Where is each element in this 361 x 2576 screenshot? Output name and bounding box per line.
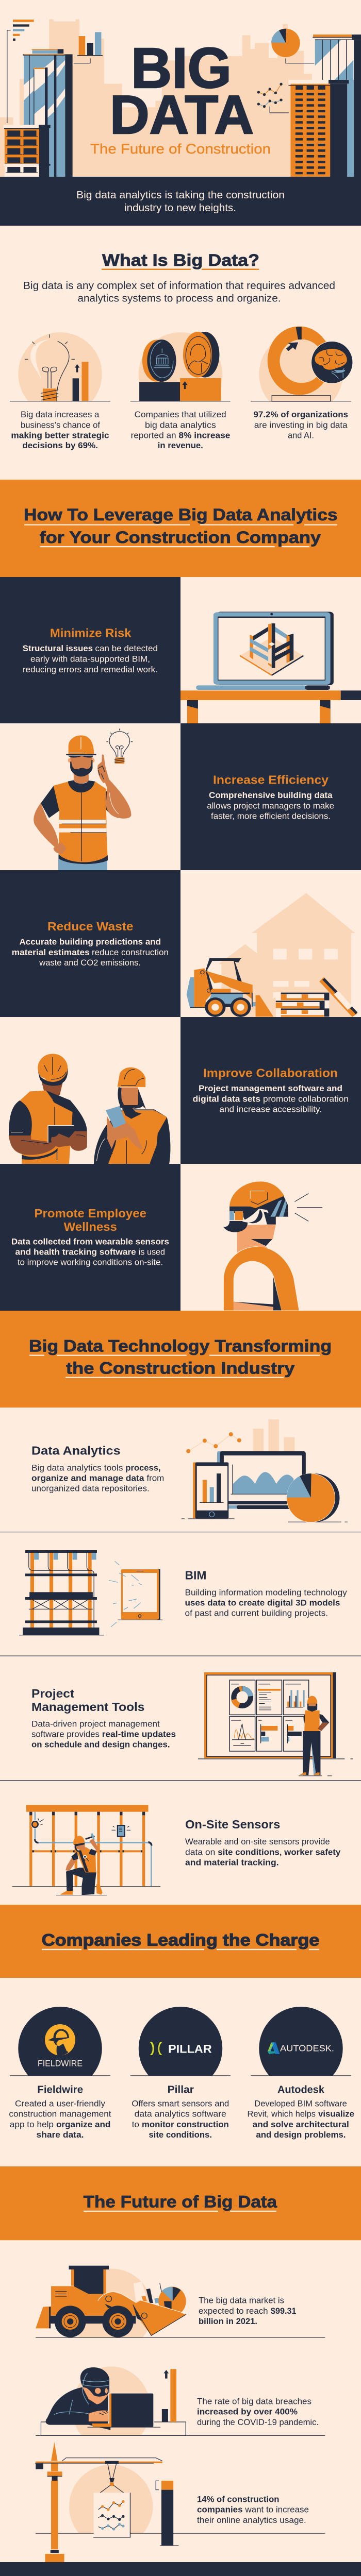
illustration: worker pointing at light bulb xyxy=(34,728,133,870)
minimize risk text: can be detected xyxy=(95,644,158,653)
reduce waste text: waste and CO2 emissions. xyxy=(39,958,141,968)
panel: future heading band xyxy=(0,2166,361,2240)
on-site sensors text: and material tracking. xyxy=(185,1858,279,1867)
increase efficiency text: faster, more efficient decisions. xyxy=(211,811,331,821)
project management text: Project xyxy=(31,1687,74,1700)
reduce waste text: reduce construction xyxy=(92,948,169,957)
stat: organizations: and AI. xyxy=(288,431,314,440)
stat: revenue: big data analytics xyxy=(145,420,216,430)
on-site sensors text: On-Site Sensors xyxy=(185,1818,280,1831)
illustration: worker in smart helmet xyxy=(223,1181,322,1310)
data analytics text: Big data analytics tools xyxy=(31,1464,123,1473)
improve collaboration text: Improve Collaboration xyxy=(203,1066,338,1080)
illustration: charts on monitor and phone xyxy=(182,1419,348,1522)
analytics text: companies xyxy=(197,2505,242,2515)
illustration: building frame and tablet xyxy=(19,1550,162,1635)
subtitle: The Future of Construction xyxy=(90,141,271,157)
stat: revenue: reported an xyxy=(131,431,176,440)
stat: organizations: are investing in big data xyxy=(254,420,348,430)
illustration: laptop with 3D building on desk xyxy=(180,612,361,723)
illustration: loader carrying charts xyxy=(36,2266,325,2338)
increase efficiency text: Comprehensive building data xyxy=(209,791,333,800)
autodesk text: Autodesk xyxy=(277,2084,325,2095)
pillar text: Pillar xyxy=(168,2084,194,2095)
reduce waste text: Accurate building predictions and xyxy=(20,937,161,946)
pillar text: site conditions. xyxy=(149,2130,212,2140)
autodesk text: and design problems. xyxy=(256,2130,346,2140)
reduce waste text: material estimates xyxy=(12,948,90,957)
fieldwire text: share data. xyxy=(36,2130,84,2140)
increase efficiency text: Increase Efficiency xyxy=(213,773,329,787)
on-site sensors text xyxy=(185,1818,341,1867)
employee wellness text: Data collected from wearable sensors xyxy=(11,1237,169,1246)
footer xyxy=(0,2562,361,2576)
breaches text: during the COVID-19 pandemic. xyxy=(197,2418,319,2427)
intro band: Big data analytics is taking the construction xyxy=(76,190,285,201)
BIM text xyxy=(185,1568,348,1618)
stat: revenue: Companies that utilized xyxy=(135,410,226,419)
improve collaboration text: and increase accessibility. xyxy=(219,1105,322,1114)
stat: revenue xyxy=(131,410,230,450)
data analytics text xyxy=(31,1444,164,1494)
title: BIG xyxy=(131,37,232,100)
stat: revenue: 8% increase xyxy=(178,431,230,440)
market text: billion in 2021. xyxy=(199,2317,257,2326)
title xyxy=(110,37,254,145)
panel: big data technology heading band: Big Data Technology Transforming xyxy=(29,1336,332,1355)
illustration: worker at stud wall with sensors xyxy=(12,1805,160,1895)
employee wellness text xyxy=(11,1207,169,1267)
minimize risk text xyxy=(23,626,158,674)
market text: expected to reach xyxy=(199,2307,268,2316)
project management text: real-time updates xyxy=(102,1730,176,1739)
illustration: two workers with tablet and phone xyxy=(9,1054,170,1164)
icon: light bulb and rising bars xyxy=(10,332,110,402)
fieldwire text: construction management xyxy=(9,2110,111,2119)
panel: data analytics xyxy=(31,1419,348,1522)
logo: fieldwire: FIELDWIRE xyxy=(38,2059,83,2068)
panel: on-site sensors xyxy=(12,1805,341,1895)
project management text xyxy=(31,1687,176,1750)
panel: what is big data xyxy=(10,251,353,450)
breaches text: The rate of big data breaches xyxy=(197,2397,311,2406)
analytics text xyxy=(197,2495,309,2525)
pillar text xyxy=(132,2084,229,2140)
improve collaboration text: Project management software and xyxy=(199,1084,342,1093)
project management text: software provides xyxy=(31,1730,100,1739)
reduce waste text: Reduce Waste xyxy=(47,920,133,933)
logo: autodesk: AUTODESK. xyxy=(280,2043,334,2054)
pillar text: to xyxy=(132,2120,139,2129)
minimize risk text: Structural issues xyxy=(23,644,93,653)
logo: fieldwire xyxy=(10,2007,110,2076)
increase efficiency text xyxy=(207,773,334,821)
panel: how to leverage heading band: How To Leverage Big Data Analytics xyxy=(24,505,337,524)
panel: increase efficiency xyxy=(34,723,361,870)
improve collaboration text xyxy=(193,1066,349,1114)
definition text xyxy=(23,280,335,304)
project management text: Data-driven project management xyxy=(31,1720,160,1729)
BIM text: Building information modeling technology xyxy=(185,1588,348,1597)
logo: autodesk xyxy=(251,2007,351,2076)
breaches text xyxy=(197,2397,319,2427)
improve collaboration text: promote collaboration xyxy=(263,1094,349,1104)
panel: big data technology heading band: the Construction Industry xyxy=(66,1359,295,1378)
logo: pillar xyxy=(130,2007,231,2076)
stat: revenue: in revenue. xyxy=(158,441,203,450)
intro band: industry to new heights. xyxy=(124,202,236,214)
improve collaboration text: digital data sets xyxy=(193,1094,260,1104)
breaches text: increased by over 400% xyxy=(197,2408,298,2417)
panel: how to leverage heading band xyxy=(0,480,361,577)
analytics text: 14% of construction xyxy=(197,2495,280,2504)
BIM text: uses data to create digital 3D models xyxy=(185,1598,340,1607)
BIM text: BIM xyxy=(185,1568,206,1582)
fieldwire text: Created a user-friendly xyxy=(15,2099,106,2108)
minimize risk text: early with data-supported BIM, xyxy=(30,654,150,664)
project management text: on schedule and design changes. xyxy=(31,1740,170,1750)
panel: online analytics xyxy=(35,2442,325,2562)
panel: big data technology heading band xyxy=(0,1311,361,1408)
stat: decisions xyxy=(11,410,109,450)
on-site sensors text: site conditions, worker safety xyxy=(218,1848,341,1857)
panel: project management tools xyxy=(31,1672,353,1776)
hero illustration: city skyline with data charts xyxy=(0,19,361,177)
panel: promote employee wellness xyxy=(0,1164,322,1311)
market text: The big data market is xyxy=(199,2296,284,2306)
panel: hero xyxy=(0,19,361,226)
employee wellness text: Wellness xyxy=(64,1220,117,1233)
panel: future heading band: The Future of Big Data xyxy=(84,2193,277,2211)
stat: organizations xyxy=(254,410,348,440)
minimize risk text: Minimize Risk xyxy=(50,626,132,640)
logo: pillar: PILLAR xyxy=(168,2042,212,2055)
on-site sensors text: data on xyxy=(185,1848,215,1857)
BIM text: of past and current building projects. xyxy=(185,1608,328,1618)
illustration: skid steer, house and pallets xyxy=(187,893,357,1017)
fieldwire text xyxy=(9,2084,111,2140)
definition text: Big data is any complex set of information that requires advanced xyxy=(23,280,335,292)
illustration: dashboard board with worker xyxy=(198,1672,353,1776)
title: DATA xyxy=(110,84,254,145)
stat: decisions: business’s chance of xyxy=(21,420,100,430)
fieldwire text: organize and xyxy=(56,2120,110,2129)
on-site sensors text: Wearable and on-site sensors provide xyxy=(185,1837,330,1846)
analytics text: want to increase xyxy=(244,2505,309,2515)
data analytics text: organize and manage data xyxy=(31,1474,144,1483)
icon: 97.2% donut with brain xyxy=(251,326,353,402)
minimize risk text: reducing errors and remedial work. xyxy=(23,665,158,674)
autodesk text xyxy=(248,2084,354,2140)
panel: companies heading band xyxy=(0,1905,361,1978)
icon: coins on rising blocks xyxy=(130,332,231,402)
reduce waste text xyxy=(12,920,169,968)
employee wellness text: to improve working conditions on-site. xyxy=(18,1258,163,1267)
definition text: analytics systems to process and organize. xyxy=(77,293,281,304)
stat: decisions: decisions by 69%. xyxy=(22,441,98,450)
panel: fieldwire xyxy=(9,2007,111,2140)
panel: autodesk xyxy=(248,2007,354,2140)
data analytics text: Data Analytics xyxy=(31,1444,121,1457)
autodesk text: Developed BIM software xyxy=(254,2099,347,2108)
panel: BIM xyxy=(19,1550,348,1635)
project management text: Management Tools xyxy=(31,1700,144,1714)
analytics text: their online analytics usage. xyxy=(197,2516,306,2525)
employee wellness text: and health tracking software xyxy=(15,1248,136,1257)
data analytics text: unorganized data repositories. xyxy=(31,1484,150,1494)
panel: companies heading band: Companies Leading the Charge xyxy=(42,1931,319,1950)
illustration: masked hacker at laptop xyxy=(36,2366,325,2450)
employee wellness text: is used xyxy=(139,1248,165,1257)
pillar text: monitor construction xyxy=(142,2120,229,2129)
stat: decisions: making better strategic xyxy=(11,431,109,440)
market text: $99.31 xyxy=(271,2307,296,2316)
fieldwire text: Fieldwire xyxy=(37,2084,83,2095)
illustration: crane lifting chart panel xyxy=(35,2442,325,2562)
panel: reduce waste xyxy=(0,870,357,1017)
data analytics text: process, xyxy=(125,1464,161,1473)
stat: organizations: 97.2% of organizations xyxy=(254,410,348,419)
autodesk text: visualize xyxy=(318,2110,354,2119)
panel: pillar xyxy=(130,2007,231,2140)
heading: What Is Big Data? xyxy=(102,251,259,269)
increase efficiency text: allows project managers to make xyxy=(207,801,334,810)
autodesk text: and solve architectural xyxy=(253,2120,349,2129)
panel: market forecast xyxy=(36,2266,325,2338)
stat: decisions: Big data increases a xyxy=(21,410,100,419)
panel: improve collaboration xyxy=(9,1017,361,1164)
intro band xyxy=(0,177,361,226)
pillar text: Offers smart sensors and xyxy=(132,2099,229,2108)
market text xyxy=(199,2296,296,2326)
employee wellness text: Promote Employee xyxy=(34,1207,146,1220)
pillar text: data analytics software xyxy=(135,2110,226,2119)
fieldwire text: app to help xyxy=(10,2120,54,2129)
data analytics text: from xyxy=(146,1474,164,1483)
panel: minimize risk xyxy=(0,577,361,723)
panel: how to leverage heading band: for Your Construction Company xyxy=(40,528,321,547)
autodesk text: Revit, which helps xyxy=(248,2110,316,2119)
panel: data breaches xyxy=(36,2366,325,2436)
